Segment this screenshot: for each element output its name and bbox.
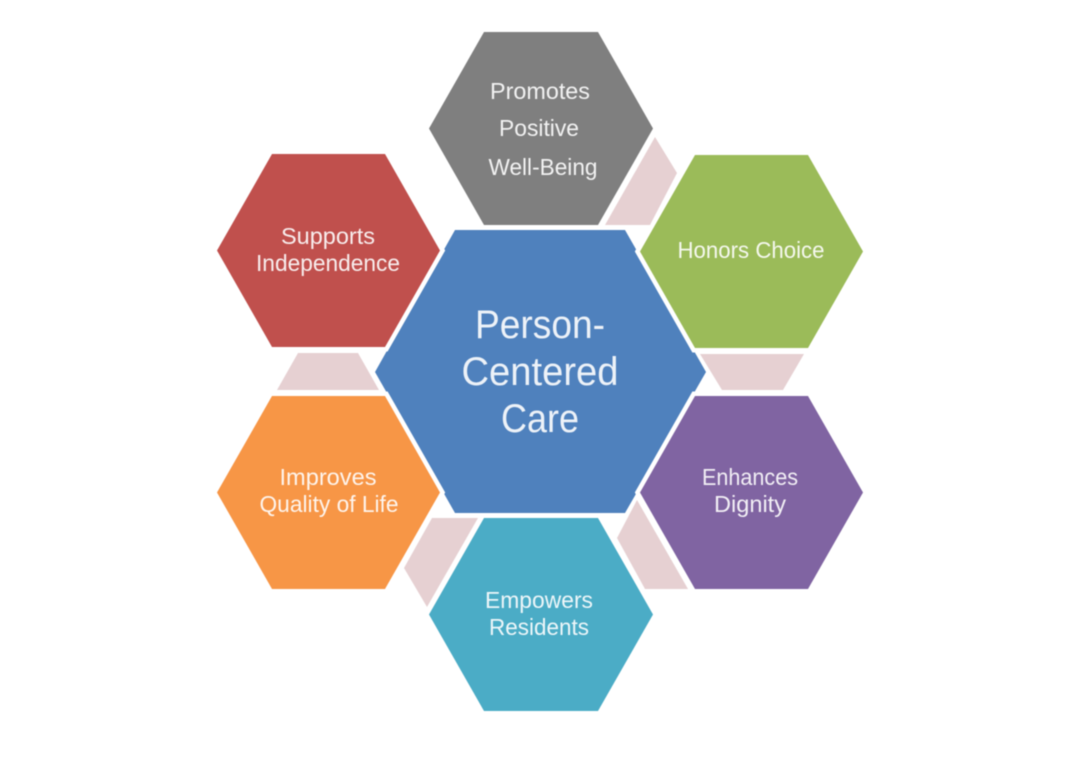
connector: top right (605, 137, 677, 225)
center hexagon: Care (501, 397, 579, 441)
connector: bottom right (617, 500, 688, 589)
hexagon: Supports Independence: Supports (281, 223, 375, 249)
hexagon: Improves Quality of Life: Quality of Life (260, 491, 398, 517)
hexagon: Improves Quality of Life: Improves (280, 464, 376, 490)
hexagon: Enhances Dignity: Dignity (714, 491, 787, 517)
connector: bottom left (404, 518, 478, 607)
hexagon: Empowers Residents: Empowers (485, 587, 593, 613)
hexagon: Promotes Positive Well-Being: Positive (499, 115, 579, 141)
hexagon: Supports Independence (217, 154, 440, 347)
hexagon: Honors Choice (640, 155, 863, 348)
connector: left (277, 353, 379, 390)
connector: right (700, 354, 804, 390)
hexagon: Empowers Residents: Residents (489, 614, 589, 640)
center hexagon: Person- (475, 303, 605, 347)
hexagon: Enhances Dignity: Enhances (702, 464, 798, 490)
hexagon: Empowers Residents (429, 518, 653, 711)
center hexagon: Centered (462, 350, 618, 394)
hexagon: Promotes Positive Well-Being (429, 32, 653, 225)
hexagon: Honors Choice: Honors Choice (678, 237, 824, 263)
center hexagon (375, 230, 706, 513)
hexagon: Promotes Positive Well-Being: Promotes (490, 78, 590, 104)
hexagon: Enhances Dignity (640, 396, 863, 589)
hexagon: Promotes Positive Well-Being: Well-Being (488, 154, 598, 180)
hexagon: Improves Quality of Life (217, 396, 440, 589)
hexagon: Supports Independence: Independence (256, 250, 400, 276)
